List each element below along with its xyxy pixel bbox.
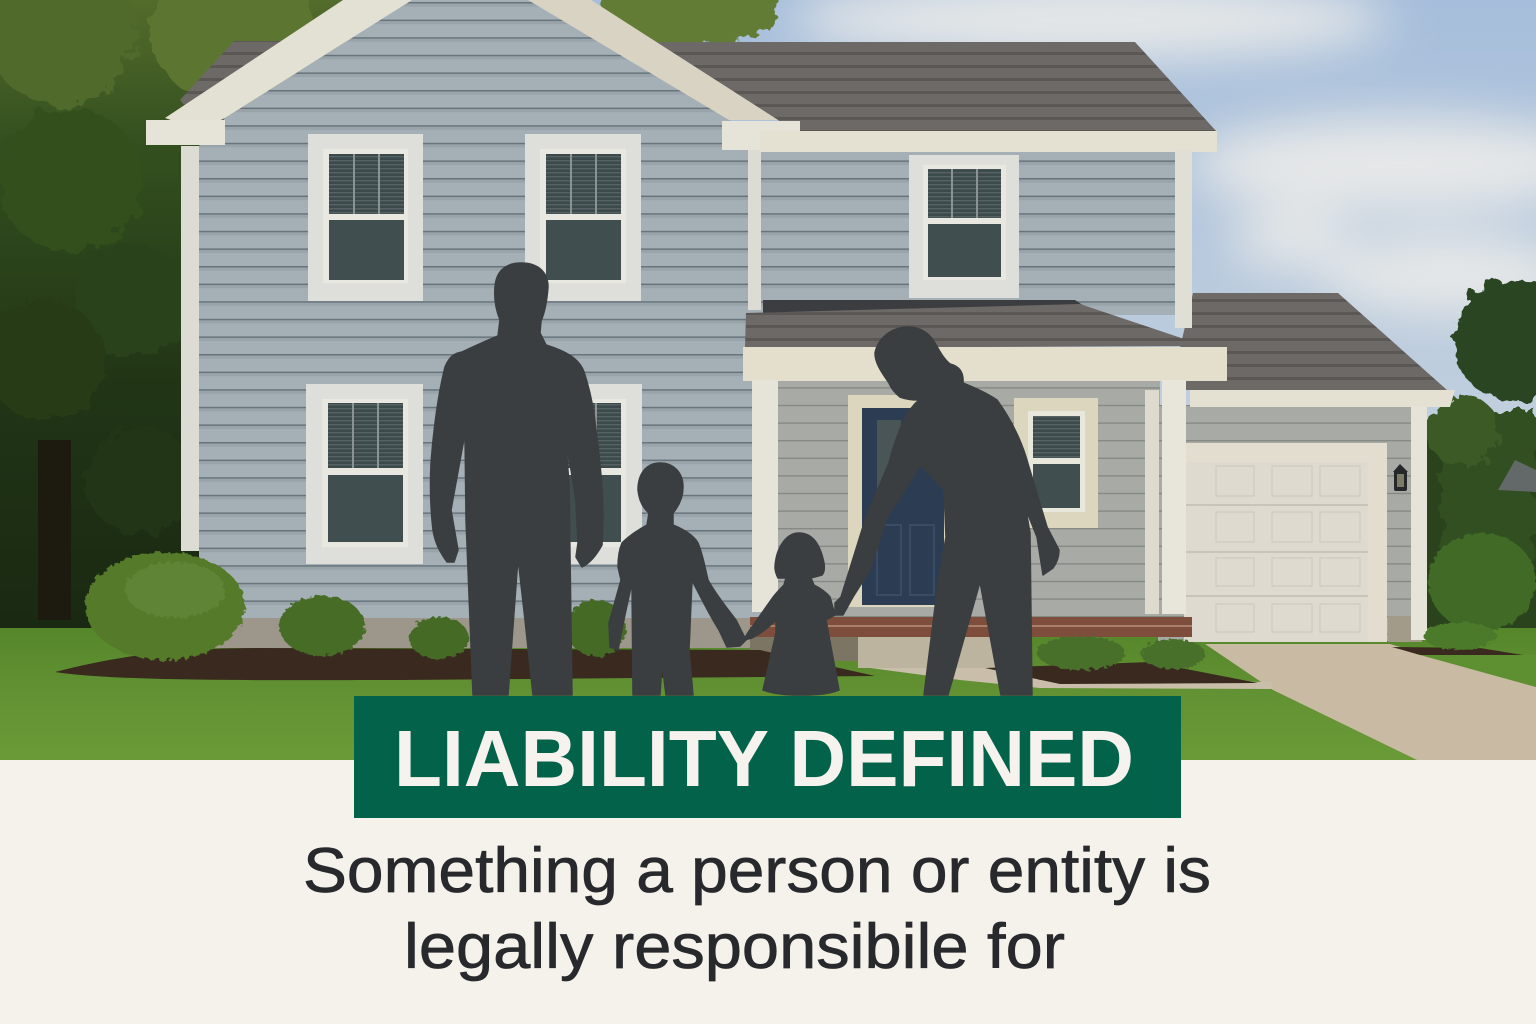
definition line 1: Something a person or entity is — [303, 836, 1211, 906]
tree trunk — [38, 440, 71, 620]
right upper wall — [752, 150, 1177, 315]
top right tree behind roof — [602, 0, 778, 47]
garden beds — [55, 647, 1523, 684]
window upper middle — [525, 134, 641, 301]
distant house roof — [1498, 460, 1536, 492]
lawn — [0, 628, 1536, 762]
lower cream panel — [0, 760, 1536, 1024]
shrubs — [85, 533, 1536, 670]
right corner trim — [1411, 407, 1427, 640]
right trees — [1426, 278, 1536, 560]
window lower left — [306, 384, 423, 564]
porch column left — [752, 380, 778, 612]
main roof — [656, 42, 1217, 132]
gable fascia right — [528, 0, 778, 120]
garage roof — [1170, 293, 1447, 390]
porch roof — [745, 304, 1205, 348]
right lawn corner — [1420, 655, 1536, 687]
front walkway — [870, 668, 1272, 689]
front door — [848, 395, 948, 607]
right tree backdrop — [1425, 420, 1536, 640]
title text: LIABILITY DEFINED — [394, 714, 1134, 803]
left corner trim — [181, 146, 199, 551]
definition line 2: legally responsibile for — [404, 912, 1065, 982]
trees behind the house — [0, 0, 1536, 640]
right eave — [722, 121, 800, 150]
definition text — [303, 836, 1211, 982]
house — [146, 0, 1455, 668]
center trim — [748, 150, 761, 310]
driveway — [1205, 644, 1536, 760]
right trim — [1175, 150, 1192, 328]
porch window — [1014, 398, 1098, 528]
upper concrete step — [750, 637, 858, 661]
father — [430, 263, 603, 695]
porch wall — [760, 375, 1160, 617]
right fascia — [760, 131, 1217, 152]
left eave return — [146, 120, 225, 145]
concrete step — [858, 637, 1003, 668]
title banner — [354, 696, 1181, 818]
girl — [744, 533, 839, 695]
garage door — [1184, 443, 1387, 642]
gable fascia left — [165, 0, 412, 130]
porch beam — [743, 347, 1227, 381]
window upper left — [308, 134, 423, 301]
left main wall — [199, 0, 760, 620]
boy — [609, 463, 746, 695]
left roof edge — [180, 41, 281, 112]
left tree mass — [0, 0, 345, 640]
porch column right — [1162, 380, 1186, 614]
window lower middle — [525, 384, 642, 564]
left tree foliage — [0, 0, 310, 535]
brick steps — [750, 617, 1192, 637]
garage foundation — [1388, 616, 1422, 642]
porch roof shadow strip — [763, 300, 1090, 314]
garage wall — [1158, 405, 1414, 641]
window upper right — [909, 155, 1019, 298]
mother — [835, 327, 1059, 695]
porch column thin — [1145, 390, 1159, 614]
wall lamp — [1393, 464, 1408, 491]
foundation — [199, 618, 752, 648]
sky with clouds — [320, 0, 1536, 640]
family silhouette — [430, 263, 1059, 695]
garage fascia — [1190, 390, 1455, 407]
